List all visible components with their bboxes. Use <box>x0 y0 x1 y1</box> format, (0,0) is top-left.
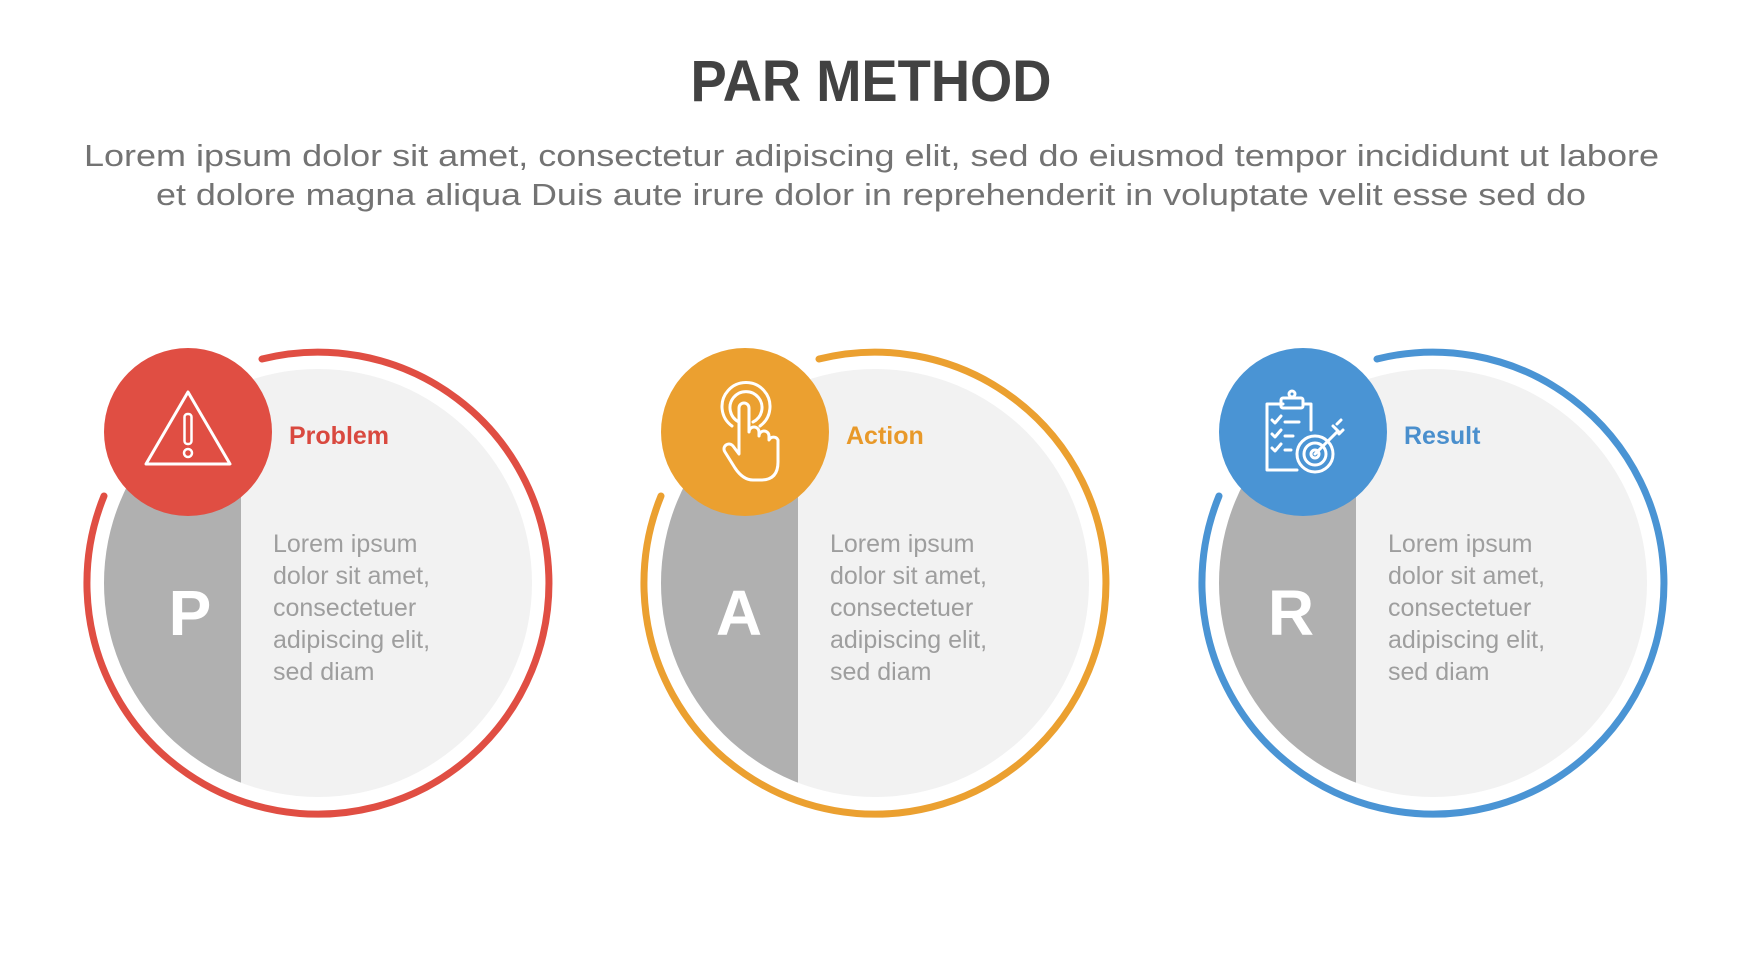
heading: Result: Result <box>1404 422 1481 450</box>
panel: action <box>644 348 1106 814</box>
body text: dolor sit amet, <box>273 562 430 590</box>
body text: adipiscing elit, <box>273 626 430 654</box>
subtitle: et dolore magna aliqua Duis aute irure dolor in reprehenderit in voluptate velit esse sed do <box>156 177 1586 212</box>
body text: Lorem ipsum <box>1388 530 1532 558</box>
body text: consectetuer <box>830 594 973 622</box>
letter P: P <box>169 577 211 649</box>
body text: Lorem ipsum <box>830 530 974 558</box>
body text <box>1388 530 1545 686</box>
icon: touch badge <box>661 348 829 516</box>
heading: Problem: Problem <box>289 422 389 450</box>
panel: result <box>1202 348 1664 814</box>
body text: dolor sit amet, <box>830 562 987 590</box>
body text <box>830 530 987 686</box>
body text: sed diam <box>1388 658 1489 686</box>
body text: consectetuer <box>1388 594 1531 622</box>
body text: consectetuer <box>273 594 416 622</box>
body text: sed diam <box>830 658 931 686</box>
body text: adipiscing elit, <box>1388 626 1545 654</box>
letter A: A <box>716 577 762 649</box>
body text <box>273 530 430 686</box>
subtitle: Lorem ipsum dolor sit amet, consectetur adipiscing elit, sed do eiusmod tempor incididunt ut labore <box>84 138 1659 173</box>
heading: Action: Action <box>846 422 924 450</box>
title: PAR METHOD <box>690 49 1052 114</box>
body text: sed diam <box>273 658 374 686</box>
panel: problem <box>87 348 549 814</box>
body text: adipiscing elit, <box>830 626 987 654</box>
body text: dolor sit amet, <box>1388 562 1545 590</box>
icon: warning badge <box>104 348 272 516</box>
subtitle <box>84 138 1659 212</box>
body text: Lorem ipsum <box>273 530 418 558</box>
letter R: R <box>1268 577 1314 649</box>
icon: clipboard target badge <box>1219 348 1387 516</box>
